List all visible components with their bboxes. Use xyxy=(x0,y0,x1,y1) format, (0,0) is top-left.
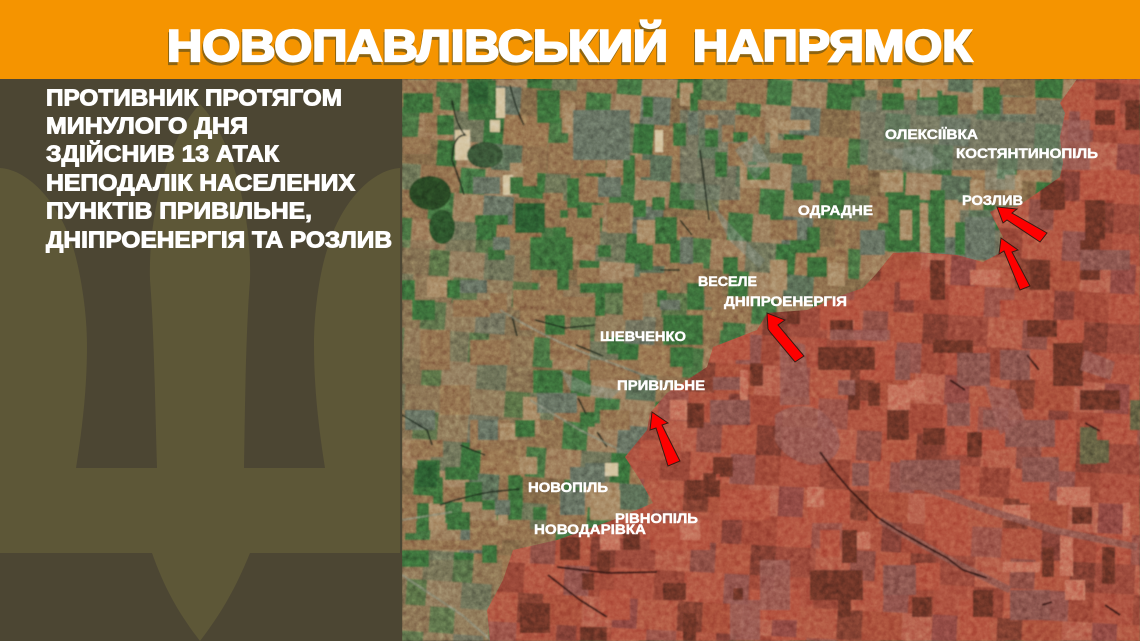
text block: attack summary: ДНІПРОЕНЕРГІЯ ТА РОЗЛИВ xyxy=(46,226,392,252)
text block: attack summary: МИНУЛОГО ДНЯ xyxy=(46,112,248,138)
text block: attack summary: ПУНКТІВ ПРИВІЛЬНЕ, xyxy=(46,198,312,224)
label: Олексіївка: ОЛЕКСІЇВКА xyxy=(885,127,978,142)
text block: attack summary: ПРОТИВНИК ПРОТЯГОМ xyxy=(46,84,342,110)
title: НОВОПАВЛІВСЬКИЙ xyxy=(166,23,667,74)
title: НАПРЯМОК xyxy=(692,25,972,74)
rivers xyxy=(402,85,709,505)
map labels xyxy=(528,127,1098,537)
panel: left text panel xyxy=(0,79,402,641)
label: Новопіль: НОВОПІЛЬ xyxy=(528,480,608,495)
header bar xyxy=(0,0,1140,79)
text block: attack summary: НЕПОДАЛІК НАСЕЛЕНИХ xyxy=(46,170,356,196)
label: Костянтинопіль: КОСТЯНТИНОПІЛЬ xyxy=(956,146,1098,161)
label: Шевченко: ШЕВЧЕНКО xyxy=(600,329,686,344)
map tone overlay xyxy=(402,79,1140,641)
map texture grain xyxy=(402,79,1140,641)
text block: attack summary xyxy=(46,84,392,252)
emblem: trident background xyxy=(0,104,400,641)
arrow: Привільне xyxy=(650,412,680,466)
title: НОВОПАВЛІВСЬКИЙ xyxy=(167,20,668,71)
label: Веселе: ВЕСЕЛЕ xyxy=(698,274,757,289)
label: Привільне: ПРИВІЛЬНЕ xyxy=(617,378,705,393)
label: Одрадне: ОДРАДНЕ xyxy=(798,203,873,218)
title xyxy=(166,20,973,74)
text block: attack summary: ЗДІЙСНИВ 13 АТАК xyxy=(46,140,280,166)
arrow: Дніпроенергія xyxy=(767,313,804,362)
label: Рівнопіль: РІВНОПІЛЬ xyxy=(615,511,698,526)
arrow: Розлив lower xyxy=(999,238,1030,290)
title: НАПРЯМОК xyxy=(693,22,973,71)
map: satellite terrain with fields xyxy=(402,79,1140,641)
arrow: Розлив upper xyxy=(997,207,1047,242)
label: Дніпроенергія: ДНІПРОЕНЕРГІЯ xyxy=(724,294,847,309)
label: Новодарівка: НОВОДАРІВКА xyxy=(534,522,646,537)
map: occupied territory red zone xyxy=(487,79,1140,641)
label: Розлив: РОЗЛИВ xyxy=(962,193,1023,208)
forest xyxy=(409,176,451,210)
